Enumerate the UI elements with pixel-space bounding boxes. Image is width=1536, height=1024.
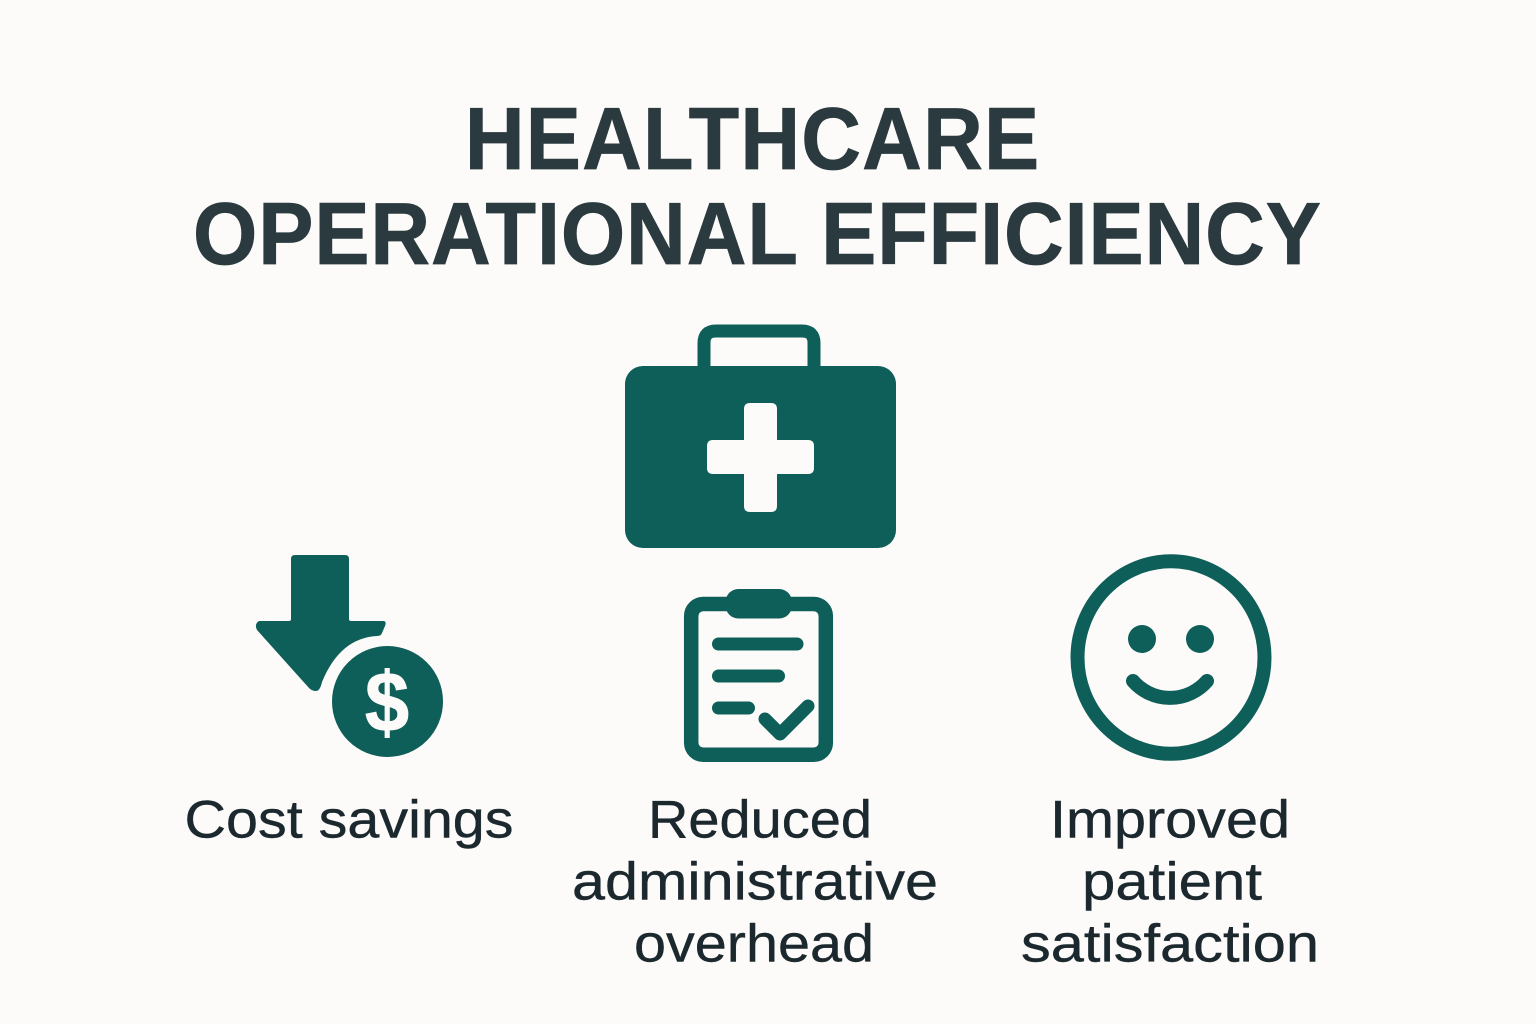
label: reduced administrative overhead: overhead (634, 914, 874, 974)
title: OPERATIONAL EFFICIENCY (193, 186, 1321, 284)
icon: cost savings arrow with dollar (256, 555, 443, 757)
label: improved patient satisfaction: satisfaction (1021, 914, 1319, 974)
label: reduced administrative overhead: Reduced (648, 790, 872, 850)
icon: cost savings arrow with dollar: $ (365, 655, 409, 749)
label: improved patient satisfaction: Improved (1050, 790, 1290, 850)
title (193, 91, 1321, 284)
label: improved patient satisfaction: patient (1082, 852, 1262, 912)
title: HEALTHCARE (465, 91, 1039, 189)
icon: clipboard with checklist (691, 589, 826, 755)
label: improved patient satisfaction (1021, 790, 1319, 974)
label: reduced administrative overhead: administrative (572, 852, 938, 912)
label: reduced administrative overhead (572, 790, 938, 974)
label: cost savings: Cost savings (184, 790, 514, 850)
icon: medical briefcase (625, 331, 896, 548)
icon: smiley face (1078, 561, 1264, 754)
